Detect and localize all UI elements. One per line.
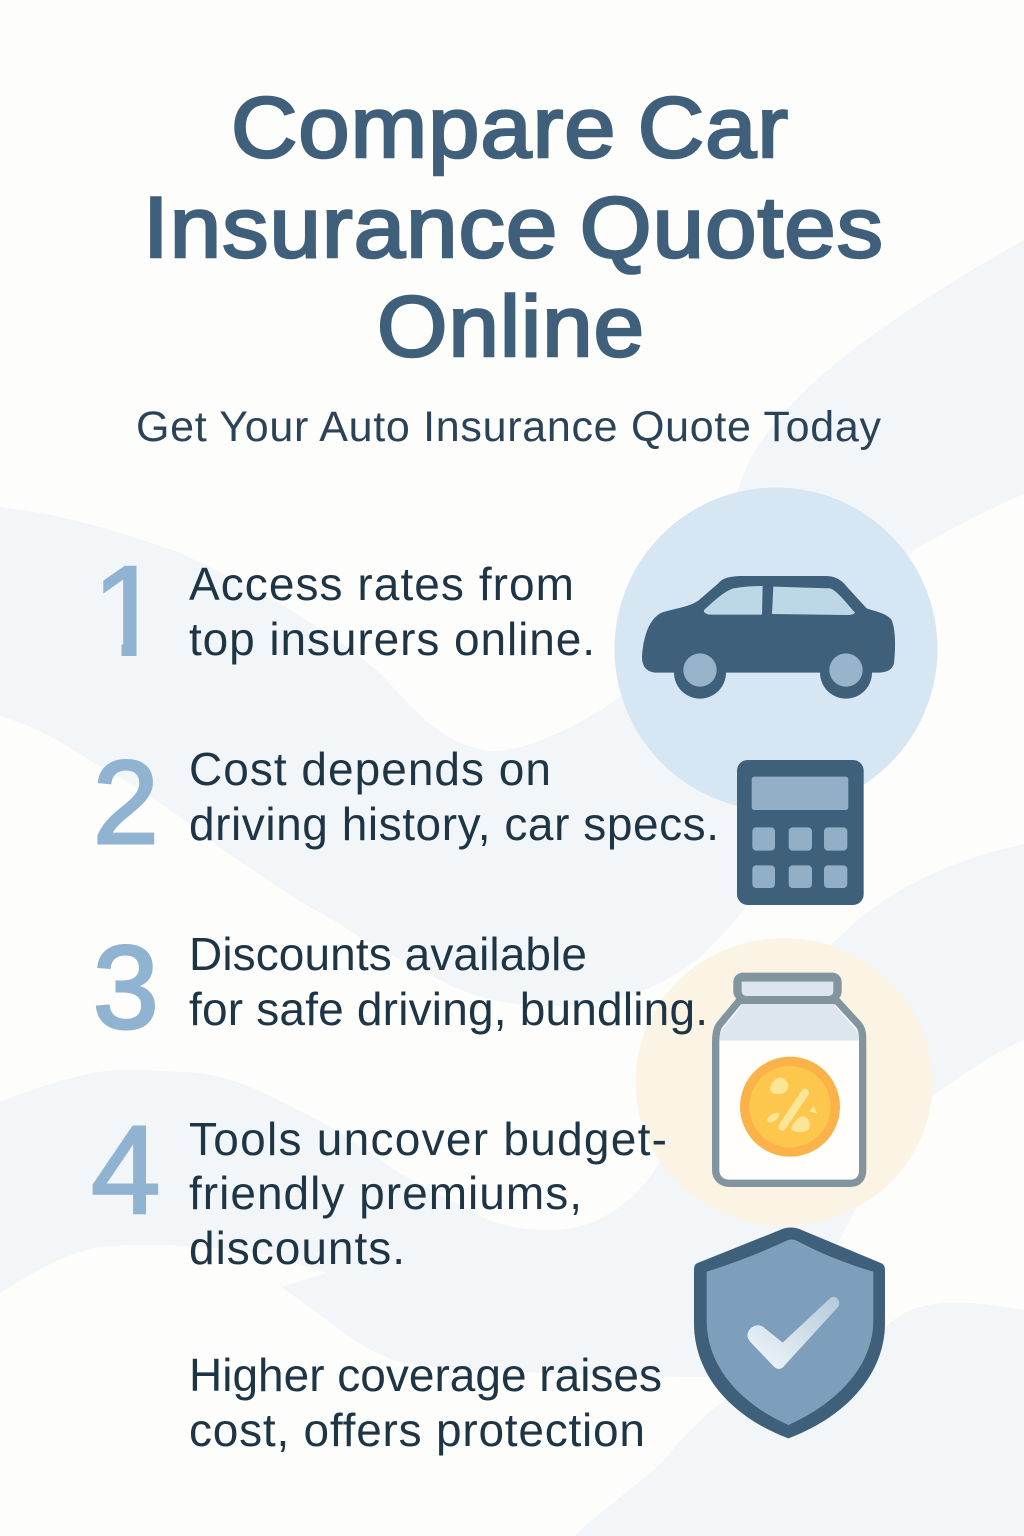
text: step 3: for safe driving, bundling. (189, 983, 708, 1035)
text: step 2: driving history, car specs. (189, 798, 719, 850)
text: step 4: discounts. (189, 1222, 405, 1274)
title: Insurance Quotes (143, 180, 884, 276)
text: step 4: friendly premiums, (189, 1167, 582, 1219)
icon: shield with check (694, 1227, 885, 1438)
text: step 1: top insurers online. (189, 613, 595, 665)
text: closing note: cost, offers protection (189, 1404, 645, 1456)
text: closing note (189, 1349, 662, 1456)
text: closing note: Higher coverage raises (189, 1349, 662, 1401)
numeral 2: 2 (93, 737, 159, 869)
numeral 3: 3 (93, 922, 159, 1054)
text: step 2 (189, 743, 719, 850)
icon: car (642, 576, 895, 699)
title: Compare Car (231, 80, 789, 176)
text: step 1 (189, 558, 595, 665)
title (143, 80, 884, 375)
text: step 1: Access rates from (189, 558, 574, 610)
circle: car backdrop (614, 488, 938, 810)
subtitle: Get Your Auto Insurance Quote Today (136, 403, 882, 451)
icon: calculator (737, 760, 864, 905)
icon: savings jar (716, 973, 863, 1183)
circle: jar backdrop (636, 938, 932, 1226)
numeral 4: 4 (91, 1101, 161, 1240)
text: step 2: Cost depends on (189, 743, 551, 795)
text: step 4 (189, 1113, 667, 1274)
text: step 4: Tools uncover budget- (189, 1113, 667, 1165)
text: step 3 (189, 928, 708, 1035)
title: Online (377, 279, 645, 375)
text: step 3: Discounts available (189, 928, 587, 980)
numeral 1: 1 (92, 540, 163, 683)
